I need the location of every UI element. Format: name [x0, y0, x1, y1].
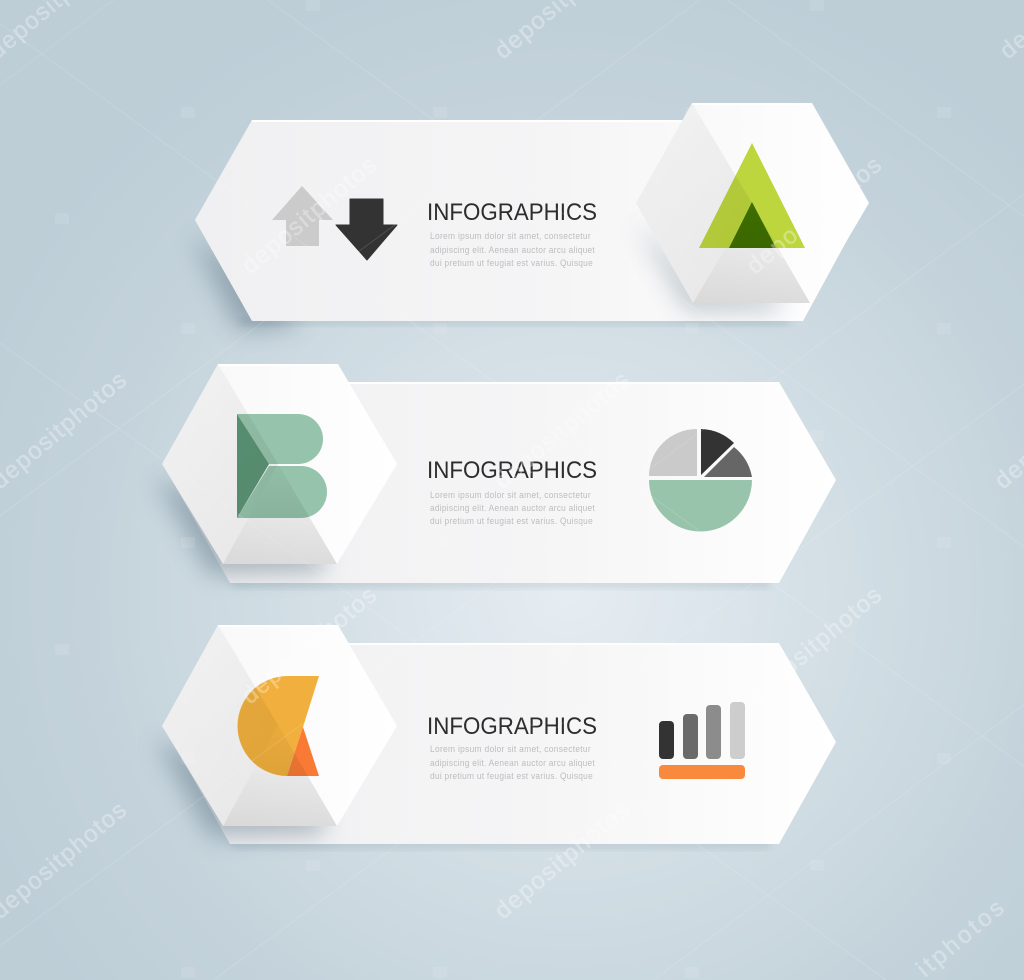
panel: top banner	[192, 103, 869, 330]
body text	[430, 490, 595, 526]
banner left shadow	[192, 236, 300, 330]
body text: dui pretium ut feugiat est varius. Quisque	[430, 771, 593, 781]
fold shading	[162, 625, 337, 826]
watermarks: depositphotos	[490, 367, 635, 495]
down arrow	[336, 199, 397, 260]
banner body	[195, 120, 858, 321]
banner bottom shadow	[225, 839, 770, 849]
body text: adipiscing elit. Aenean auctor arcu aliquet	[430, 245, 595, 255]
banner bottom shadow	[240, 318, 790, 325]
heading: INFOGRAPHICS	[427, 199, 597, 226]
icon: arrows up and down	[272, 186, 397, 260]
hexagon shadow	[636, 222, 780, 312]
icon: pie chart	[649, 429, 752, 532]
letter B	[237, 414, 327, 518]
body text: adipiscing elit. Aenean auctor arcu aliquet	[430, 758, 595, 768]
body text: Lorem ipsum dolor sit amet, consectetur	[430, 231, 591, 241]
icon: bar chart	[659, 702, 745, 779]
letter C	[238, 676, 319, 776]
heading: INFOGRAPHICS	[427, 457, 597, 484]
watermarks: depositphotos	[237, 152, 382, 280]
up arrow	[272, 186, 333, 246]
body text	[430, 231, 595, 268]
panel: bottom banner	[156, 625, 836, 849]
heading: INFOGRAPHICS	[427, 713, 597, 740]
watermarks: depositphotos	[237, 582, 382, 710]
hexagon top edge	[218, 625, 338, 627]
banner top edge	[340, 382, 779, 384]
panel: middle banner	[156, 364, 836, 588]
hexagon shadow	[156, 478, 325, 575]
hexagon badge A	[636, 103, 869, 303]
fold shading	[162, 364, 337, 564]
banner body	[173, 643, 836, 844]
hexagon shadow	[156, 740, 325, 837]
letter A	[699, 143, 805, 248]
fold shading	[636, 103, 810, 303]
banner top edge	[252, 120, 700, 122]
watermarks: itphotos	[912, 894, 1009, 980]
body text: dui pretium ut feugiat est varius. Quisque	[430, 258, 593, 268]
body text: Lorem ipsum dolor sit amet, consectetur	[430, 744, 591, 754]
hexagon top edge	[218, 364, 338, 366]
hexagon badge B	[162, 364, 397, 564]
watermarks: depositphotos	[742, 582, 887, 710]
banner bottom shadow	[225, 578, 770, 588]
body text: Lorem ipsum dolor sit amet, consectetur	[430, 490, 591, 500]
hexagon badge C	[162, 625, 397, 826]
watermarks: depositphotos	[490, 797, 635, 925]
watermarks: depositphotos	[742, 152, 887, 280]
body text: adipiscing elit. Aenean auctor arcu aliquet	[430, 503, 595, 513]
body text	[430, 744, 595, 781]
hexagon top edge	[692, 103, 812, 105]
banner top edge	[345, 643, 779, 645]
banner body	[173, 382, 836, 583]
body text: dui pretium ut feugiat est varius. Quisque	[430, 516, 593, 526]
